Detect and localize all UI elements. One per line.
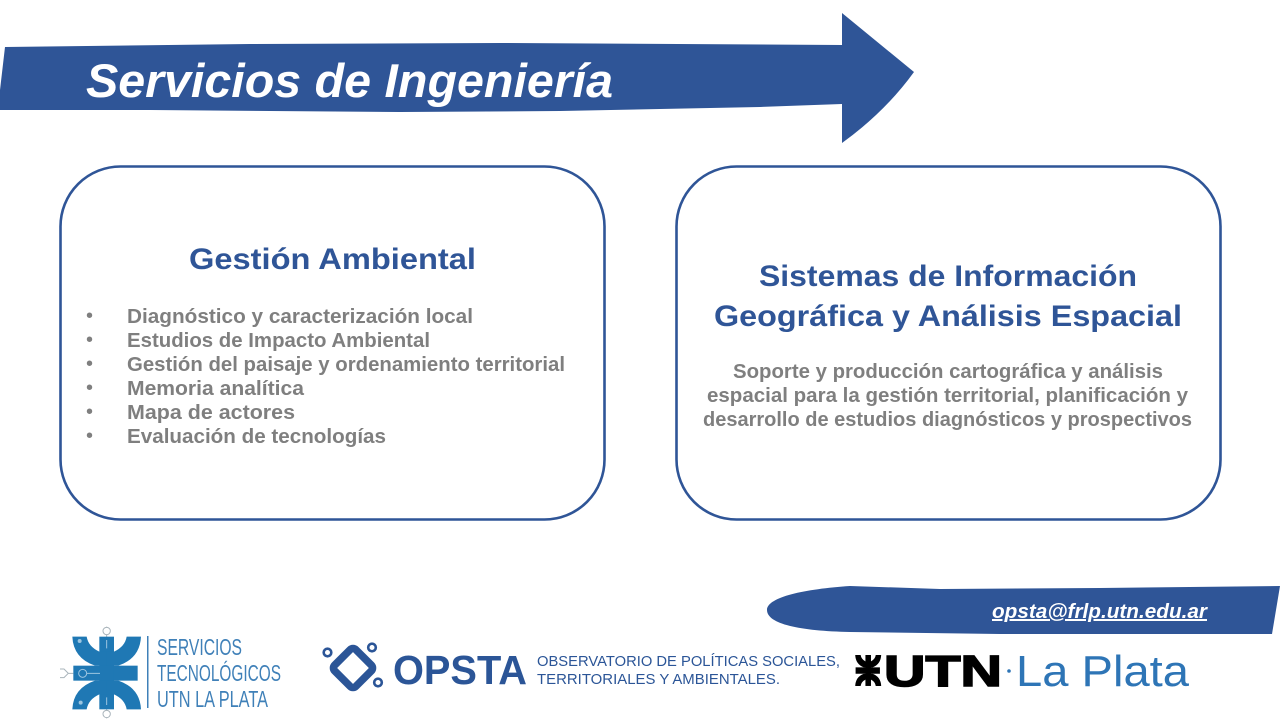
bullet list: • [86, 353, 93, 375]
description text: desarrollo de estudios diagnósticos y prospectivos [703, 409, 1192, 431]
bullet list: • [86, 329, 93, 351]
logo: UTN La Plata [855, 647, 1190, 696]
logo: UTN La Plata: UTN [884, 647, 1002, 696]
icon: UTN black star [855, 655, 881, 686]
logo wordmark: UTN LA PLATA [157, 686, 268, 712]
bullet list: Diagnóstico y caracterización local [127, 306, 473, 328]
heading: Sistemas de Información Geográfica y Análisis Espacial: Geográfica y Análisis Espacial [714, 300, 1182, 333]
description text: espacial para la gestión territorial, planificación y [707, 385, 1189, 407]
logo: Servicios Tecnológicos UTN La Plata [60, 627, 281, 718]
contact banner [767, 586, 1280, 634]
icon: OPSTA diamond [324, 644, 382, 689]
bullet list: • [86, 377, 93, 399]
heading: Sistemas de Información Geográfica y Análisis Espacial: Sistemas de Información [759, 260, 1137, 293]
panel: Sistemas de Información Geográfica [676, 166, 1220, 520]
logo wordmark: SERVICIOS [157, 634, 242, 660]
contact banner: opsta@frlp.utn.edu.ar [992, 601, 1208, 623]
heading: Sistemas de Información Geográfica y Análisis Espacial [714, 260, 1182, 333]
bullet list: Gestión del paisaje y ordenamiento territorial [127, 354, 565, 376]
logo: OPSTA: OPSTA [393, 647, 527, 693]
header arrow with title: Servicios de Ingeniería [86, 54, 613, 107]
description text [703, 361, 1192, 431]
bullet list: • [86, 401, 93, 423]
icon: UTN emblem [60, 627, 141, 718]
OPSTA tagline [537, 653, 840, 688]
bullet list [86, 305, 565, 448]
bullet list: • [86, 425, 93, 447]
bullet list: Memoria analítica [127, 378, 305, 400]
heading: Gestión Ambiental: Gestión Ambiental [189, 243, 476, 276]
bullet list: Evaluación de tecnologías [127, 426, 386, 448]
logo wordmark: TECNOLÓGICOS [157, 660, 281, 686]
bullet list: Estudios de Impacto Ambiental [127, 330, 430, 352]
logo: UTN La Plata: La Plata [1016, 647, 1190, 696]
description text: Soporte y producción cartográfica y análisis [733, 361, 1163, 383]
logo: OPSTA [324, 644, 840, 693]
bullet list: • [86, 305, 93, 327]
header arrow with title [0, 13, 914, 143]
bullet list: Mapa de actores [127, 402, 295, 424]
OPSTA tagline: TERRITORIALES Y AMBIENTALES. [537, 672, 780, 688]
OPSTA tagline: OBSERVATORIO DE POLÍTICAS SOCIALES, [537, 653, 840, 670]
logo wordmark [157, 634, 281, 712]
panel: Gestión Ambiental [60, 166, 604, 520]
